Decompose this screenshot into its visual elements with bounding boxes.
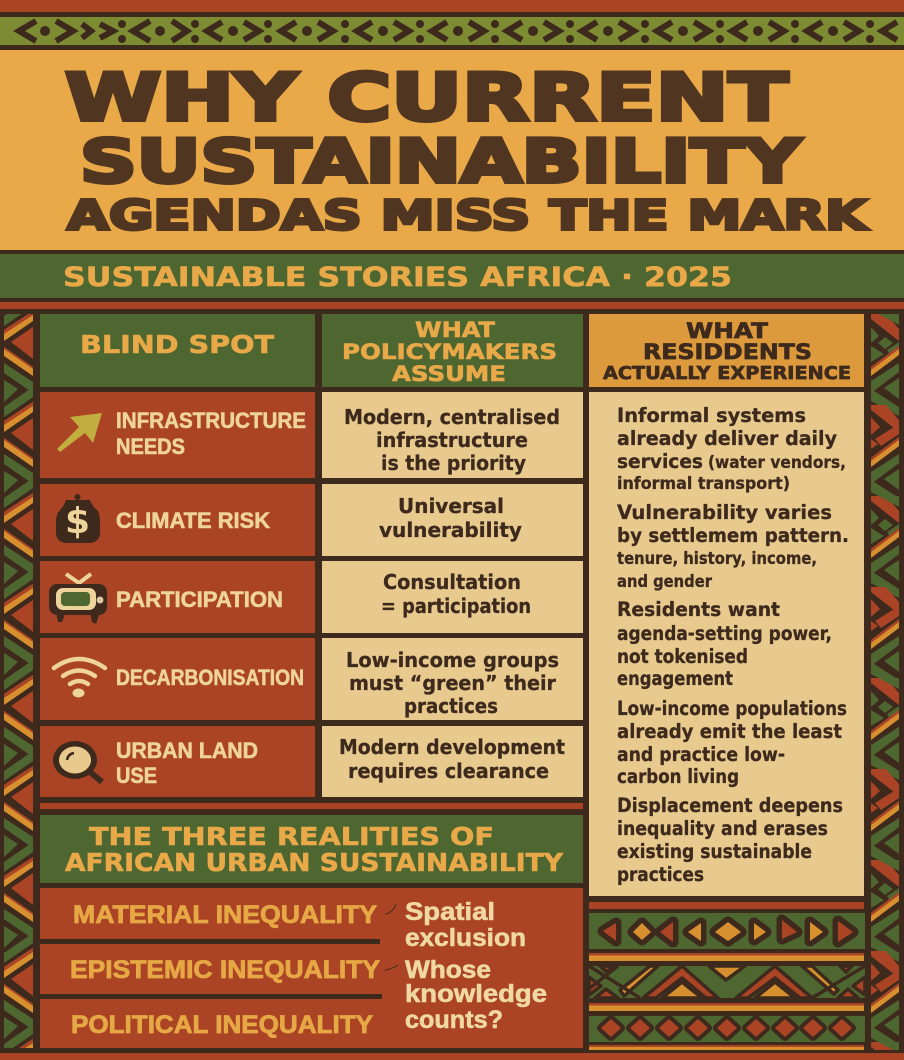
right patterned border [871, 314, 899, 1050]
assumption: infrastructure: infrastructure [376, 428, 528, 452]
title: AGENDAS MISS THE MARK [67, 192, 870, 240]
assumption: urban land use [322, 726, 583, 797]
inequality outcomes [405, 898, 547, 1034]
label: decarbonisation: DECARBONISATION [116, 665, 304, 690]
pattern band: zigzag chevrons [589, 966, 865, 998]
experience: urban land use: Displacement deepens [617, 794, 843, 817]
label: climate risk: CLIMATE RISK [116, 508, 270, 533]
title panel [0, 50, 904, 250]
column header: what residents actually experience: WHAT [686, 319, 769, 343]
experience: infrastructure: already deliver daily [617, 427, 837, 450]
experience: urban land use: practices [617, 863, 704, 886]
row: infrastructure needs [40, 392, 315, 478]
top geometric pattern band [0, 17, 904, 45]
label: infrastructure needs: INFRASTRUCTURE [116, 408, 306, 433]
title: SUSTAINABILITY [80, 127, 803, 197]
pattern band: triangles and diamonds [589, 913, 865, 949]
icon: television [49, 574, 107, 624]
row: climate risk [40, 484, 315, 556]
inequality labels: EPISTEMIC INEQUALITY [70, 956, 380, 984]
assumption: participation: Consultation [383, 570, 521, 594]
subtitle band [0, 254, 904, 298]
label: infrastructure needs [116, 408, 306, 459]
assumption: urban land use: Modern development [339, 735, 565, 759]
label: urban land use: USE [116, 763, 157, 788]
inequality labels [70, 901, 380, 1039]
subtitle band: SUSTAINABLE STORIES AFRICA · 2025 [63, 262, 732, 293]
assumption: infrastructure: is the priority [381, 451, 526, 475]
assumption: climate risk: vulnerability [379, 518, 522, 542]
bottom red band [0, 1053, 904, 1060]
red divider under table [40, 803, 583, 809]
column header: what residents actually experience [589, 314, 864, 387]
experience: infrastructure: services [617, 450, 703, 473]
row: urban land use [40, 726, 315, 797]
assumption: infrastructure: Modern, centralised [344, 405, 560, 429]
connector marks [385, 904, 398, 970]
left patterned border [4, 314, 33, 1048]
panel: what residents experience [589, 392, 864, 896]
experience: participation: agenda-setting power, [617, 622, 832, 645]
experience: infrastructure: informal transport) [617, 474, 790, 493]
inequality labels: POLITICAL INEQUALITY [71, 1011, 373, 1039]
assumption: infrastructure [322, 392, 583, 478]
column header: what policymakers assume [322, 314, 583, 387]
heading: three realities: THE THREE REALITIES OF [89, 822, 494, 851]
assumption: participation [322, 561, 583, 633]
experience: climate risk: by settlemem pattern. [617, 524, 849, 547]
column header: blind spot: BLIND SPOT [80, 330, 274, 359]
experience: decarbonisation: Low-income populations [617, 697, 847, 720]
column header: what residents actually experience: ACTUALLY EXPERIENCE [603, 364, 851, 384]
experience: participation: not tokenised [617, 645, 748, 668]
inequality outcomes: exclusion [405, 924, 526, 952]
column header: what residents actually experience: RESIDDENTS [643, 340, 812, 364]
top red band [0, 0, 904, 12]
experience: climate risk: tenure, history, income, [617, 549, 817, 568]
experience: urban land use: inequality and erases [617, 817, 828, 840]
experience: decarbonisation: carbon living [617, 765, 739, 788]
stripe [589, 1045, 864, 1050]
title [65, 61, 870, 240]
experience: infrastructure [617, 404, 846, 493]
label: participation: PARTICIPATION [116, 587, 283, 612]
experience: infrastructure: (water vendors, [708, 453, 846, 472]
experience: urban land use: existing sustainable [617, 840, 812, 863]
row: decarbonisation [40, 638, 315, 720]
assumption: decarbonisation [322, 638, 583, 720]
stripe [589, 1003, 864, 1011]
experience: decarbonisation: and practice low- [617, 743, 785, 766]
column header: what policymakers assume: WHAT [415, 318, 496, 342]
column header: what policymakers assume: ASSUME [392, 362, 506, 386]
icon: wifi signal [54, 659, 105, 696]
heading: three realities [40, 815, 583, 883]
experience: participation: Residents want [617, 598, 780, 621]
experience: decarbonisation [617, 697, 847, 788]
inequality outcomes: Whose [405, 956, 491, 984]
experience: climate risk: Vulnerability varies [617, 501, 832, 524]
label: urban land use: URBAN LAND [116, 738, 258, 763]
icon: money bag [56, 494, 100, 543]
assumption: decarbonisation: practices [404, 694, 498, 718]
heading: three realities: AFRICAN URBAN SUSTAINABILITY [65, 848, 564, 877]
icon: arrow [57, 413, 102, 452]
icon: money bag: $ [65, 501, 90, 542]
column header: blind spot [40, 314, 315, 387]
column header: what policymakers assume: POLICYMAKERS [342, 340, 557, 364]
label: infrastructure needs: NEEDS [116, 434, 185, 459]
panel: three inequalities [40, 888, 583, 1048]
experience: participation [617, 598, 832, 690]
inequality outcomes: Spatial [405, 898, 495, 926]
assumption: decarbonisation: Low-income groups [346, 648, 559, 672]
icon: magnifying glass [53, 741, 102, 782]
assumption: participation: = participation [381, 594, 531, 618]
red divider band [0, 302, 904, 309]
assumption: climate risk: Universal [398, 494, 504, 518]
inequality outcomes: knowledge [405, 980, 547, 1008]
decorative pattern panel, lower right [589, 902, 865, 1050]
stripe [589, 953, 864, 961]
pattern band: red diamonds [589, 1016, 865, 1042]
inequality outcomes: counts? [405, 1006, 503, 1034]
inequality labels: MATERIAL INEQUALITY [73, 901, 377, 929]
assumption: decarbonisation: must “green” their [349, 671, 556, 695]
experience: infrastructure: Informal systems [617, 404, 806, 427]
assumption: climate risk [322, 484, 583, 556]
experience: participation: engagement [617, 667, 733, 690]
experience: urban land use [617, 794, 843, 886]
row: participation [40, 561, 315, 633]
experience: climate risk [617, 501, 849, 591]
experience: climate risk: and gender [617, 572, 713, 591]
label: urban land use [116, 738, 258, 788]
assumption: urban land use: requires clearance [348, 759, 549, 783]
title: WHY CURRENT [65, 61, 788, 136]
experience: decarbonisation: already emit the least [617, 720, 842, 743]
